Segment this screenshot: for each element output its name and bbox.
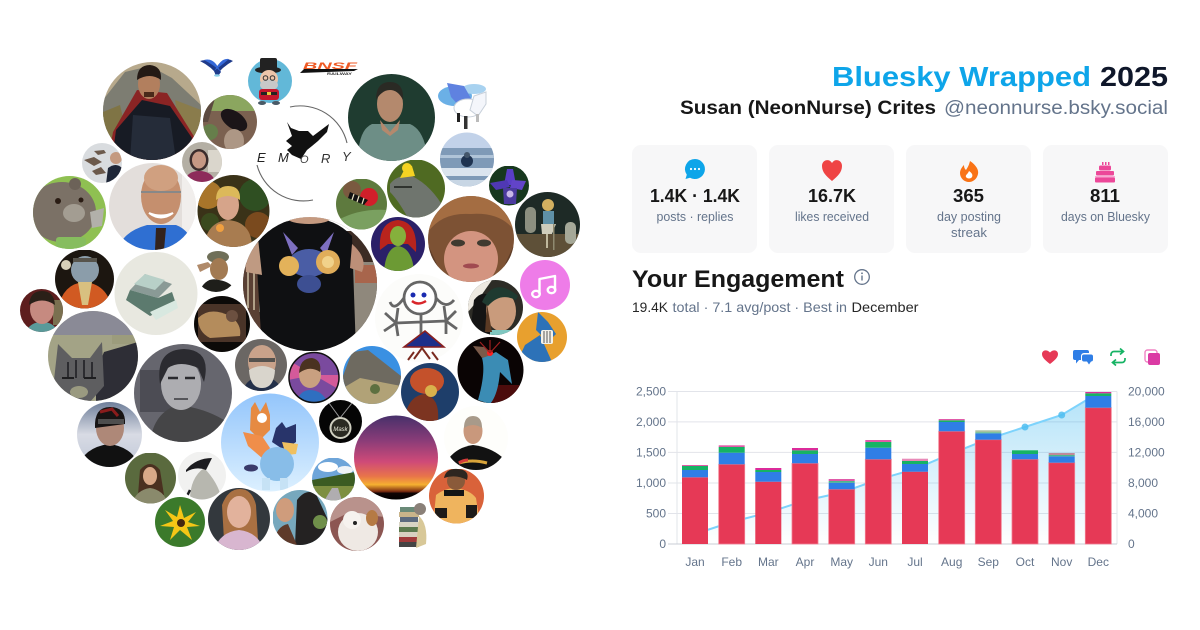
avatar: woman outdoors bbox=[125, 453, 176, 504]
x axis month labels: Oct bbox=[1016, 555, 1035, 569]
x axis month labels: Mar bbox=[758, 555, 779, 569]
x axis month labels: Dec bbox=[1088, 555, 1109, 569]
avatar: wombat bbox=[28, 176, 106, 251]
icon: emory raven logo: E bbox=[257, 150, 266, 165]
card: posts and replies: posts · replies bbox=[656, 210, 734, 224]
icon: likes legend bbox=[1042, 350, 1058, 364]
bar: Mar bbox=[755, 468, 781, 544]
icon: emory raven logo: M bbox=[278, 150, 289, 165]
avatar: red haired portrait bbox=[401, 363, 459, 421]
bar: Oct bbox=[1012, 450, 1038, 544]
bar: Jan bbox=[682, 465, 708, 544]
bar: Jun bbox=[865, 440, 891, 544]
x axis month labels: Sep bbox=[978, 555, 999, 569]
y axis labels left: 500 bbox=[646, 506, 666, 520]
avatar: mole photo bbox=[202, 95, 257, 153]
subtitle: name and handle: @neonnurse.bsky.social bbox=[944, 98, 1168, 119]
card: days on Bluesky bbox=[1043, 145, 1168, 253]
cumulative area and line bbox=[695, 393, 1098, 544]
legend icons bbox=[1042, 348, 1160, 366]
y axis labels right: 0 bbox=[1128, 537, 1135, 551]
icon: emory raven logo bbox=[257, 106, 352, 201]
avatar: man in beanie bbox=[468, 280, 523, 336]
avatar: person in ocean bbox=[440, 132, 494, 188]
avatar: caricature man bbox=[288, 352, 340, 404]
bar: Sep bbox=[975, 430, 1001, 544]
x axis month labels: Jun bbox=[869, 555, 888, 569]
panel: stat cards bbox=[632, 145, 1168, 253]
icon: emory raven logo: Y bbox=[342, 149, 352, 164]
bar: Nov bbox=[1049, 453, 1075, 544]
text: engagement summary: 19.4K bbox=[632, 299, 669, 315]
avatar: festive woman bbox=[194, 175, 271, 248]
y axis labels right: 12,000 bbox=[1128, 446, 1165, 460]
y axis labels left bbox=[636, 384, 666, 551]
text: engagement summary: December bbox=[852, 299, 919, 315]
x axis month labels: Nov bbox=[1051, 555, 1072, 569]
card: days on Bluesky: days on Bluesky bbox=[1061, 210, 1151, 224]
y axis labels left: 0 bbox=[659, 537, 666, 551]
avatar: penguin bird bbox=[178, 452, 226, 500]
x axis month labels bbox=[685, 555, 1109, 569]
x axis month labels: Apr bbox=[796, 555, 814, 569]
avatar: canyon cliffs bbox=[343, 346, 401, 404]
avatar: necklace pendant: Mask bbox=[333, 427, 349, 433]
avatar: saluting soldier bbox=[197, 251, 232, 292]
avatar: sunset bbox=[354, 415, 438, 500]
icon: emory raven logo: R bbox=[321, 151, 330, 166]
subtitle: name and handle: Susan (NeonNurse) Crites bbox=[680, 98, 936, 119]
card: posts and replies: 1.4K · 1.4K bbox=[650, 186, 740, 206]
y axis labels right: 16,000 bbox=[1128, 415, 1165, 429]
icon: railway logo bbox=[300, 61, 358, 76]
card: days on Bluesky: 811 bbox=[1090, 186, 1120, 206]
avatar: book stack reader bbox=[399, 503, 426, 548]
avatar: butterfly on flower bbox=[336, 179, 387, 230]
bar: May bbox=[829, 479, 855, 544]
avatar: blue horse bbox=[457, 337, 524, 405]
card: posting streak: day posting bbox=[937, 210, 1001, 224]
y axis labels left: 2,000 bbox=[636, 415, 666, 429]
x axis month labels: Jan bbox=[685, 555, 705, 569]
avatar: small white dog bbox=[330, 497, 384, 551]
avatar: man red background bbox=[20, 289, 63, 332]
y axis labels left: 2,500 bbox=[636, 384, 666, 398]
y axis labels left: 1,500 bbox=[636, 446, 666, 460]
icon: quotes legend bbox=[1145, 350, 1160, 365]
icon: blue wings logo bbox=[200, 59, 233, 77]
avatar: sleeping cat bbox=[194, 296, 250, 352]
icon: emory raven logo: O bbox=[300, 154, 309, 166]
avatar: man in dark beanie bbox=[77, 402, 142, 467]
text: engagement summary bbox=[632, 299, 919, 315]
avatar: country road bbox=[312, 458, 355, 501]
avatar: woman with dog bbox=[273, 490, 328, 545]
icon: railway logo: BNSF bbox=[303, 61, 358, 71]
avatar: caped sorcerer bbox=[103, 62, 201, 160]
avatar: woman with headset bbox=[182, 142, 222, 184]
avatar: blonde woman bbox=[208, 488, 270, 550]
card: posts and replies bbox=[632, 145, 757, 253]
title: Bluesky Wrapped bbox=[832, 61, 1091, 92]
subtitle: name and handle bbox=[680, 98, 1168, 119]
icon: reposts legend bbox=[1111, 348, 1125, 366]
card: likes received bbox=[769, 145, 894, 253]
avatar: iguana bbox=[387, 160, 445, 218]
avatar: tabby cat bbox=[48, 311, 138, 402]
avatar: robed creature bbox=[55, 250, 115, 310]
stacked bars bbox=[682, 392, 1111, 544]
heading: your engagement: Your Engagement bbox=[632, 266, 844, 293]
avatar: stitch shirt photo bbox=[243, 212, 380, 352]
x axis month labels: Aug bbox=[941, 555, 962, 569]
y axis labels right bbox=[1128, 384, 1165, 551]
avatar: man in green shirt bbox=[348, 74, 435, 161]
avatar: animated woman bbox=[428, 196, 514, 287]
avatar: yellow flower bbox=[155, 497, 205, 547]
icon: info bbox=[855, 270, 869, 284]
avatar: stick figure drawing bbox=[375, 274, 463, 362]
y axis labels left: 1,000 bbox=[636, 476, 666, 490]
avatar: necklace pendant bbox=[319, 400, 362, 443]
icon: pixel pegasus bbox=[438, 83, 486, 129]
x axis month labels: May bbox=[830, 555, 853, 569]
avatar: bald smiling man bbox=[109, 163, 196, 250]
avatar: black and white portrait bbox=[134, 344, 232, 442]
avatar: purple iris bbox=[489, 166, 529, 206]
title: 2025 bbox=[1100, 61, 1168, 92]
avatar: top hat gnome bbox=[248, 58, 292, 105]
bar: Jul bbox=[902, 459, 928, 544]
avatar: man in snow bbox=[82, 143, 124, 184]
y axis labels right: 8,000 bbox=[1128, 476, 1158, 490]
title bbox=[832, 61, 1168, 92]
panel: avatar cloud bbox=[20, 58, 580, 551]
avatar: woman at graveyard bbox=[515, 192, 580, 258]
card: posting streak: 365 bbox=[953, 186, 984, 206]
bar: Apr bbox=[792, 448, 818, 544]
card: likes received: 16.7K bbox=[808, 186, 856, 206]
icon: music placeholder bbox=[520, 260, 570, 310]
avatar: orange comic character bbox=[429, 469, 484, 524]
avatar: grey bearded man bbox=[235, 339, 287, 391]
y axis labels right: 20,000 bbox=[1128, 384, 1165, 398]
icon: railway logo: RAILWAY bbox=[327, 71, 352, 76]
avatar: stack of books bbox=[114, 252, 198, 336]
chart: monthly engagement stacked bars with cumulative line bbox=[636, 384, 1165, 569]
avatar: bluey cartoon bbox=[221, 393, 319, 492]
card: posting streak bbox=[906, 145, 1031, 253]
card: likes received: likes received bbox=[795, 210, 869, 224]
card: posting streak: streak bbox=[951, 226, 988, 240]
avatar: man in rainbow shirt bbox=[444, 406, 508, 470]
x axis month labels: Jul bbox=[907, 555, 923, 569]
avatar: poison ivy bbox=[371, 217, 425, 271]
text: engagement summary: total · 7.1 avg/post · Best in bbox=[672, 299, 847, 315]
y axis labels right: 4,000 bbox=[1128, 506, 1158, 520]
bar: Aug bbox=[939, 419, 965, 544]
bar: Feb bbox=[719, 445, 745, 544]
bar: Dec bbox=[1085, 392, 1111, 544]
avatar: comic hero bbox=[517, 312, 567, 362]
x axis month labels: Feb bbox=[721, 555, 742, 569]
icon: replies legend bbox=[1073, 350, 1093, 364]
